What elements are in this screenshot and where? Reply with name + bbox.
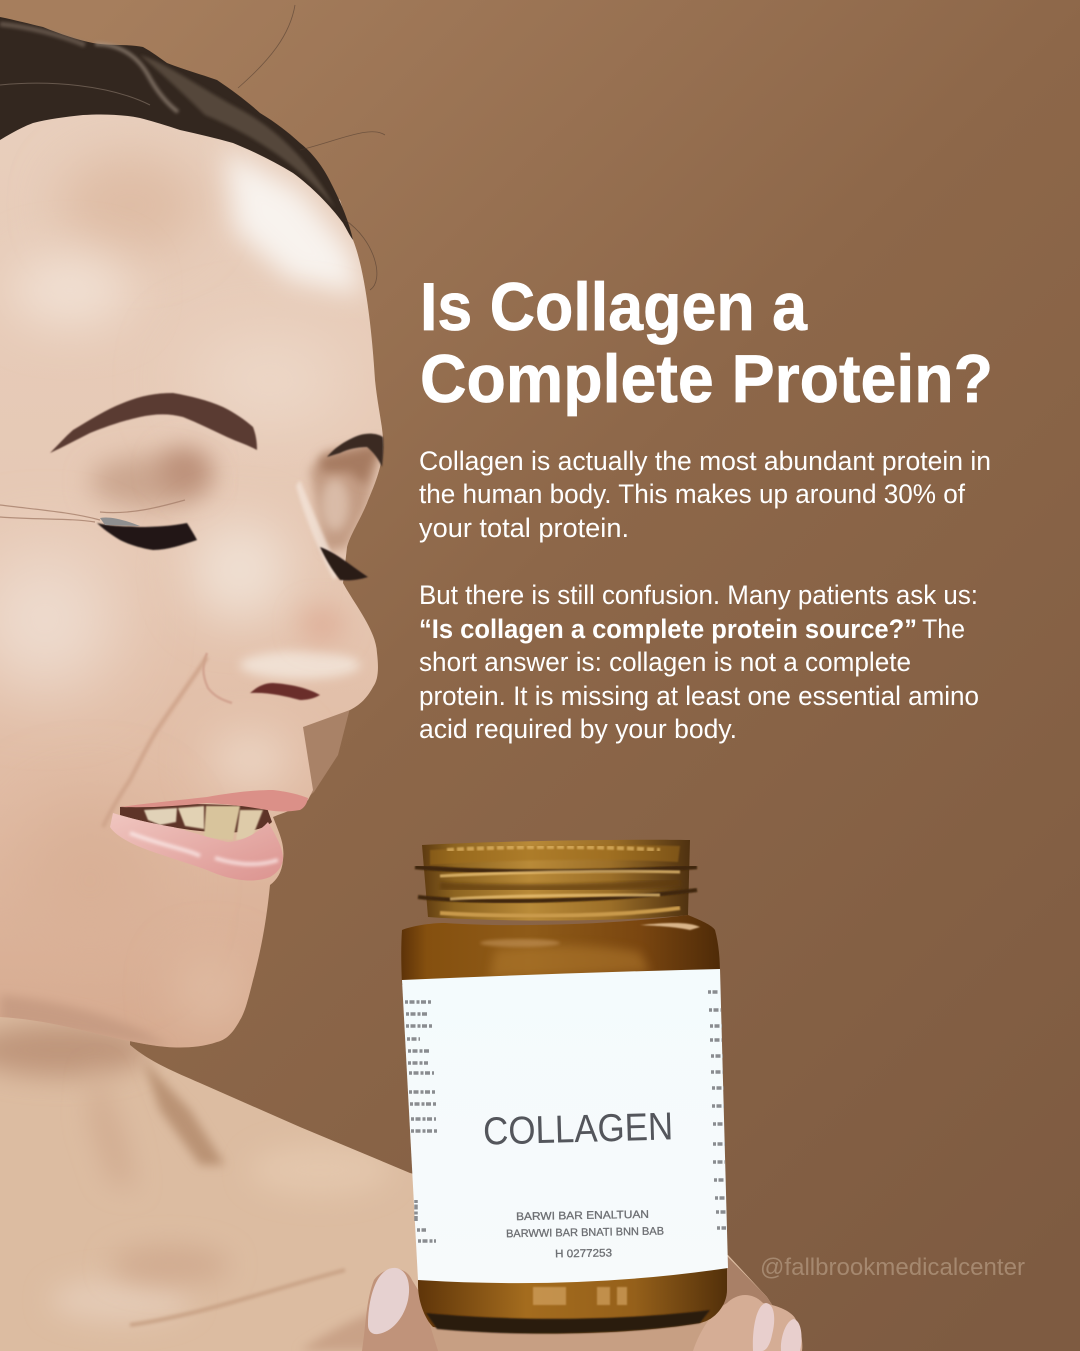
- label fine print: BARWI BAR ENALTUAN: [516, 1209, 649, 1223]
- nostril: [250, 683, 320, 700]
- answer paragraph: But there is still confusion. Many patients ask us:: [419, 580, 978, 610]
- answer paragraph: acid required by your body.: [419, 714, 737, 744]
- lip highlight: [130, 833, 278, 864]
- far cheek: [300, 705, 350, 800]
- title: [420, 269, 993, 417]
- label side print right: [708, 992, 726, 1228]
- title: Is Collagen a: [420, 269, 808, 345]
- jar bottom glass: [418, 1260, 727, 1333]
- jar glass shoulder: [401, 915, 720, 985]
- answer paragraph: The: [922, 614, 965, 644]
- neck and shoulder: [0, 1000, 810, 1351]
- answer paragraph: [419, 580, 979, 744]
- jar lid threads: [415, 840, 697, 921]
- label fine print: H 0277253: [555, 1247, 612, 1260]
- nose bridge highlight: [296, 480, 340, 580]
- intro paragraph: Collagen is actually the most abundant protein in: [419, 446, 991, 476]
- photo: woman in profile: [0, 5, 810, 1351]
- intro paragraph: your total protein.: [419, 513, 629, 543]
- label fine print: [506, 1209, 664, 1260]
- lower lip: [110, 813, 283, 881]
- intro paragraph: [419, 446, 991, 543]
- glass reflections: [490, 946, 650, 978]
- closed eye far: [320, 547, 368, 580]
- nasolabial fold: [103, 657, 207, 827]
- upper lip: [120, 790, 308, 812]
- far eyebrow: [327, 434, 383, 467]
- near fingernail finger: [362, 1269, 438, 1351]
- jar bottom dark band: [426, 1310, 710, 1334]
- intro paragraph: the human body. This makes up around 30% of: [419, 479, 965, 509]
- collagen jar: [401, 840, 728, 1334]
- face shading: [0, 150, 382, 1047]
- label side print left: [405, 1002, 437, 1241]
- nose crease: [203, 653, 232, 703]
- answer paragraph: protein. It is missing at least one essential amino: [419, 681, 979, 711]
- watermark handle: @fallbrookmedicalcenter: [760, 1254, 1025, 1281]
- jar label: [402, 969, 728, 1283]
- hair: [0, 5, 385, 290]
- teeth: [144, 806, 263, 840]
- right fingernails: [753, 1303, 802, 1351]
- right fingers: [693, 1295, 802, 1351]
- stray hairs: [238, 5, 385, 290]
- answer paragraph: “Is collagen a complete protein source?”: [419, 614, 917, 644]
- mouth interior: [120, 804, 272, 833]
- closed eye near: [97, 517, 197, 550]
- answer paragraph: short answer is: collagen is not a complete: [419, 647, 911, 677]
- far eye socket: [310, 440, 382, 552]
- eyebrow near: [50, 393, 257, 453]
- jar bottom reflections: [533, 1287, 627, 1305]
- label text: product name: COLLAGEN: [483, 1105, 674, 1154]
- fingernail: [368, 1268, 409, 1334]
- label fine print: BARWWI BAR BNATI BNN BAB: [506, 1226, 664, 1240]
- face: [0, 60, 383, 1047]
- eyelid crease: [0, 500, 185, 522]
- title: Complete Protein?: [420, 341, 993, 417]
